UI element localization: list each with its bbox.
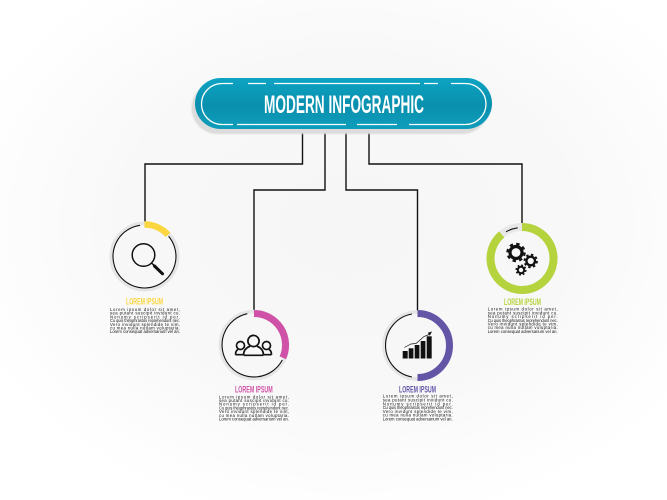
icon: gears <box>507 244 537 275</box>
text block: Lorem ipsum dolor sit amet, <box>488 307 558 312</box>
panel: growth chart <box>383 312 453 422</box>
text block: cu mea nulla nutlam voluptaria. <box>110 326 180 330</box>
text block: Lorem ipsum dolor sit amet, <box>383 394 453 399</box>
heading: LOREM IPSUM <box>126 296 163 306</box>
text block: Cu quis theophrastus reprehendunt nec. <box>383 405 453 410</box>
panel: team <box>219 312 289 422</box>
text block: sea putant suscipit invidunt cu. <box>488 310 558 315</box>
icon: magnifier <box>132 244 162 274</box>
text block: Vero invidunt splendide te vim, <box>383 409 453 414</box>
text block: cu mea nulla nutlam voluptaria. <box>219 413 289 418</box>
text block: Cu quis theophrastus reprehendunt nec. <box>219 405 289 410</box>
icon: bar chart <box>403 332 432 358</box>
heading: LOREM IPSUM <box>504 297 541 307</box>
text block <box>383 394 453 422</box>
heading: LOREM IPSUM <box>399 384 436 394</box>
text block: Lorem consequat adversarium vel an. <box>383 416 453 422</box>
text block <box>219 394 289 422</box>
text block: sea putant suscipit invidunt cu. <box>110 311 180 316</box>
title: MODERN INFOGRAPHIC <box>264 91 424 119</box>
text block: Lorem consequat adversarium vel an. <box>219 416 289 422</box>
text block: Vero invidunt splendide te vim, <box>219 409 289 414</box>
text block: Nonumy scripserit id per. <box>488 314 558 319</box>
text block: sea putant suscipit invidunt cu. <box>219 398 289 403</box>
text block: Nonumy scripserit id per. <box>383 401 453 406</box>
text block: Lorem ipsum dolor sit amet, <box>219 394 289 399</box>
text block: sea putant suscipit invidunt cu. <box>383 398 453 402</box>
panel: settings <box>488 227 558 334</box>
text block: Nonumy scripserit id per. <box>110 314 180 319</box>
text block: cu mea nulla nutlam voluptaria. <box>488 325 558 330</box>
text block: Nonumy scripserit id per. <box>219 402 289 407</box>
panel: search <box>110 223 180 334</box>
text block: cu mea nulla nutlam voluptaria. <box>383 413 453 418</box>
connector lines <box>145 129 522 311</box>
text block: Lorem consequat adversarium vel an. <box>488 329 558 334</box>
title banner <box>192 78 492 134</box>
text block: Lorem consequat adversarium vel an. <box>110 329 180 334</box>
text block: Vero invidunt splendide te vim, <box>488 322 558 326</box>
text block <box>110 307 180 334</box>
icon: people <box>236 335 272 355</box>
text block: Lorem ipsum dolor sit amet, <box>110 307 180 312</box>
text block: Cu quis theophrastus reprehendunt nec. <box>110 318 180 323</box>
text block <box>488 307 558 334</box>
heading: LOREM IPSUM <box>235 384 273 394</box>
text block: Vero invidunt splendide te vim, <box>110 322 180 327</box>
text block: Cu quis theophrastus reprehendunt nec. <box>488 318 558 323</box>
